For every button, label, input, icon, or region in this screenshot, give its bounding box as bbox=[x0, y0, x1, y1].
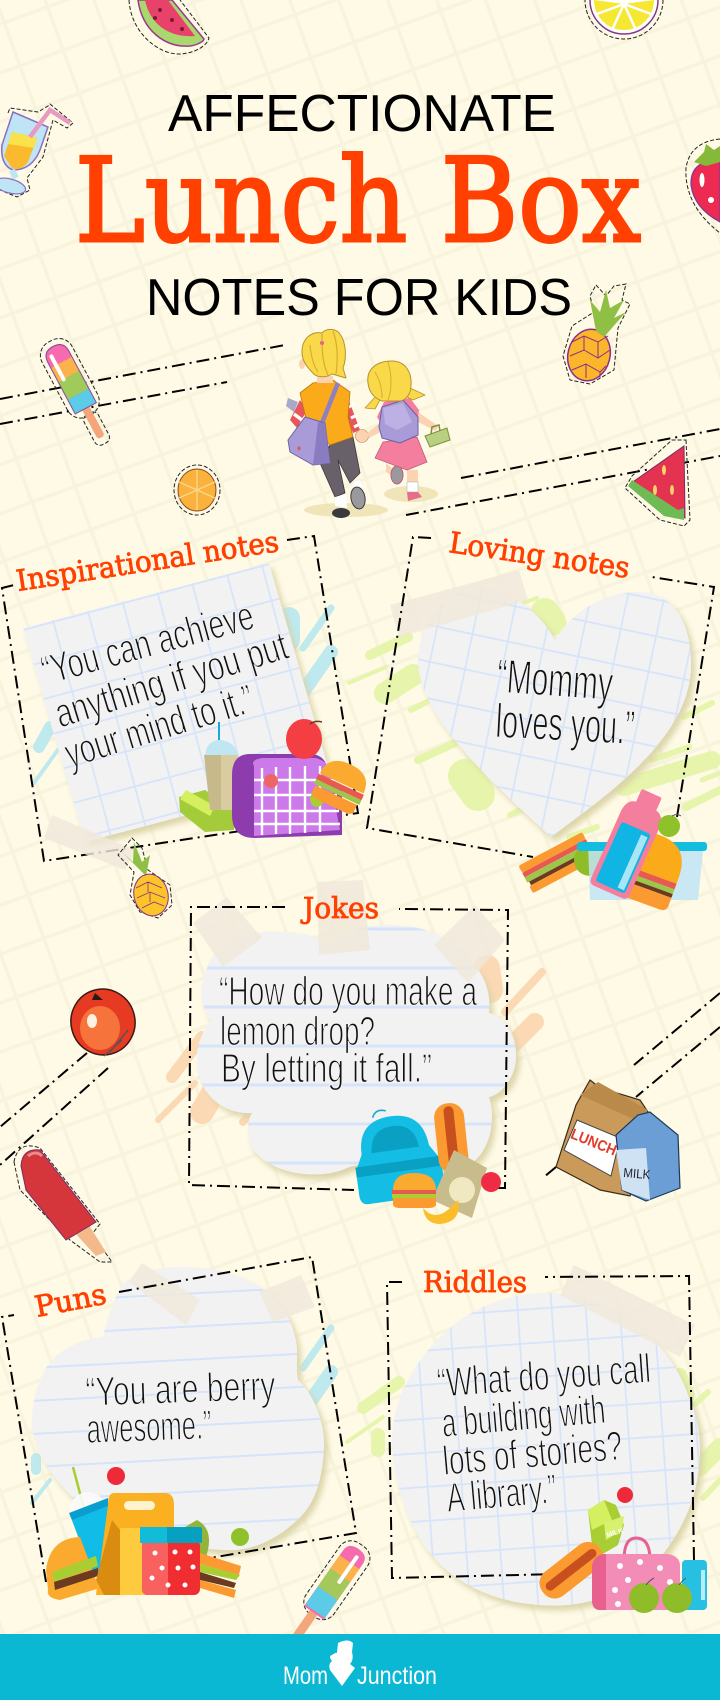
icon: lunch set bbox=[46, 1467, 249, 1600]
blue accent streaks bbox=[32, 1328, 331, 1503]
note text: awesome.” bbox=[86, 1402, 212, 1452]
sticker: small orange bbox=[174, 465, 220, 515]
heading: Inspirational notes bbox=[14, 524, 281, 598]
tapes bbox=[129, 1263, 315, 1325]
panel: riddles bbox=[347, 1265, 720, 1613]
note text bbox=[219, 968, 477, 1091]
panel: jokes bbox=[158, 880, 542, 1224]
tape bbox=[44, 815, 135, 870]
tapes bbox=[193, 880, 505, 983]
note text: A library.” bbox=[445, 1466, 558, 1521]
dashed frame bbox=[189, 907, 508, 1190]
panel: inspirational notes bbox=[2, 524, 373, 870]
green accent streaks bbox=[349, 598, 720, 837]
footer band bbox=[0, 1634, 720, 1700]
icon: lunch bag and milk carton bbox=[544, 993, 720, 1201]
note text bbox=[494, 650, 636, 755]
note text bbox=[435, 1345, 652, 1521]
icon: lunch set bbox=[179, 719, 373, 838]
ground shadows bbox=[304, 486, 438, 517]
sticker: strawberry right bbox=[686, 139, 720, 233]
icon: lunch bag and milk carton: LUNCH bbox=[568, 1126, 619, 1159]
sticker: rainbow ice pop bottom bbox=[279, 1535, 375, 1653]
title: Lunch Box bbox=[75, 134, 641, 269]
note text: “You can achieve bbox=[36, 592, 259, 694]
heading: Jokes bbox=[300, 891, 379, 925]
green accent streaks bbox=[347, 1375, 720, 1498]
younger child bbox=[365, 361, 438, 501]
blue accent streaks bbox=[34, 608, 331, 783]
small green lunch basket bbox=[425, 425, 450, 447]
panel: loving notes bbox=[349, 525, 720, 912]
sticker: pineapple mid left bbox=[118, 838, 173, 919]
note text: By letting it fall.” bbox=[221, 1045, 432, 1091]
sticker: ice pop left bbox=[35, 333, 120, 452]
panel: puns bbox=[2, 1257, 356, 1600]
note text bbox=[36, 592, 294, 777]
note text: your mind to it.” bbox=[59, 676, 259, 777]
heart note bbox=[418, 588, 691, 837]
tape bbox=[390, 570, 528, 637]
sticker: lemon slice top bbox=[585, 0, 663, 39]
sticker: red ice pop bbox=[14, 1146, 112, 1262]
dashed lines middle left bbox=[0, 1053, 108, 1165]
blob note bbox=[32, 1267, 324, 1550]
paper note bbox=[23, 563, 331, 842]
icon: lunch set bbox=[534, 1487, 707, 1613]
note text: a building with bbox=[440, 1386, 607, 1446]
sticker: watermelon slice top bbox=[129, 0, 209, 54]
illustration: children walking to school bbox=[286, 329, 450, 518]
dashed frame bbox=[387, 1276, 694, 1578]
logo: MomJunction: Junction bbox=[357, 1662, 437, 1690]
dashed frame bbox=[2, 1257, 356, 1582]
note text: anything if you put bbox=[49, 622, 294, 737]
tape bbox=[560, 1265, 695, 1357]
round note bbox=[392, 1293, 700, 1606]
note text: “You are berry bbox=[85, 1362, 277, 1415]
orange accent streaks bbox=[158, 968, 542, 1122]
title bbox=[75, 85, 641, 327]
title: AFFECTIONATE bbox=[168, 85, 556, 143]
note text bbox=[85, 1362, 277, 1452]
note text: lots of stories? bbox=[441, 1422, 624, 1484]
dashed frame bbox=[367, 537, 714, 857]
icon: lunch set: MILK bbox=[606, 1528, 624, 1539]
logo: MomJunction: Mom bbox=[283, 1662, 328, 1690]
heading: Puns bbox=[32, 1277, 109, 1324]
cloud note bbox=[197, 925, 516, 1174]
note text: “How do you make a bbox=[219, 968, 477, 1014]
note text: lemon drop? bbox=[220, 1008, 375, 1054]
icon: backpack and snacks bbox=[348, 1102, 501, 1224]
icon: sandwich, bottle and clear lunch box bbox=[518, 785, 707, 912]
icon: red apple sketch bbox=[64, 982, 142, 1062]
heading: Riddles bbox=[423, 1265, 527, 1299]
title: NOTES FOR KIDS bbox=[146, 269, 572, 327]
dashed frame bbox=[2, 536, 358, 861]
sticker: drink glass bbox=[0, 104, 73, 197]
logo: MomJunction bbox=[283, 1640, 437, 1690]
heading: Loving notes bbox=[447, 525, 632, 585]
older child bbox=[286, 329, 368, 518]
note text: “Mommy bbox=[495, 650, 615, 711]
sticker: pineapple top right bbox=[562, 284, 630, 385]
icon: lunch bag and milk carton: MILK bbox=[623, 1165, 651, 1182]
dashed lines upper band bbox=[0, 345, 720, 515]
sticker: watermelon wedge right bbox=[625, 440, 690, 526]
